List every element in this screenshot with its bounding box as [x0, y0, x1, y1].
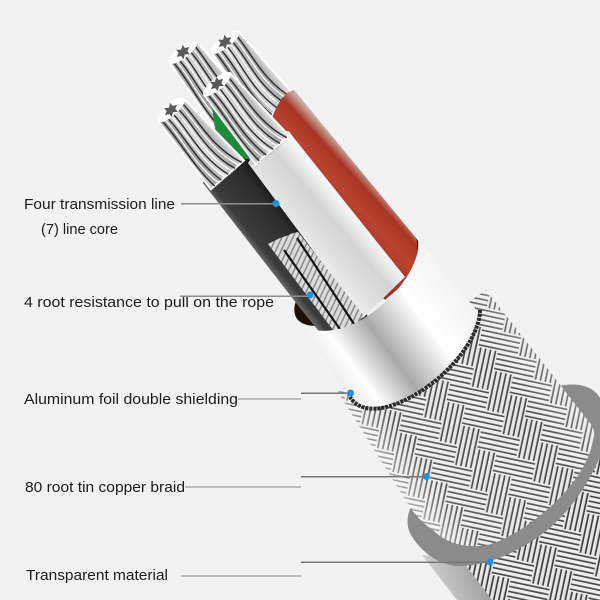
lower copper braid section — [462, 440, 600, 600]
black wire — [201, 155, 372, 345]
red wire — [272, 90, 417, 300]
frayed foil edge — [350, 310, 480, 409]
label: tin copper braid: 80 root tin copper braid — [25, 480, 185, 496]
transparent outer sheath tube — [422, 555, 494, 600]
upper copper braid section — [338, 290, 594, 546]
cable illustration — [150, 24, 600, 600]
label: resistance rope: 4 root resistance to pull on the rope — [24, 295, 274, 311]
label: four transmission line — [24, 197, 280, 213]
transparent ring — [408, 384, 600, 566]
white wire — [246, 127, 405, 318]
label: transparent material — [26, 558, 494, 584]
label: aluminum foil — [24, 390, 354, 408]
back left strand bundle — [162, 34, 253, 133]
foil opening interior — [280, 214, 434, 344]
label: transparent material: Transparent material — [26, 568, 168, 584]
label: line core: (7) line core — [41, 222, 118, 238]
back right strand bundle — [204, 24, 295, 123]
front centre strand bundle — [196, 65, 289, 164]
label: aluminum foil: Aluminum foil double shielding — [24, 392, 238, 408]
braid shading — [338, 290, 594, 546]
label: resistance rope — [24, 292, 314, 311]
front left strand bundle — [150, 91, 244, 189]
label: tin copper braid — [25, 473, 430, 496]
label: four transmission line: Four transmission line — [24, 197, 175, 213]
aluminum foil tube — [296, 240, 478, 407]
steel resistance ropes — [268, 232, 364, 334]
green wire — [212, 107, 252, 165]
